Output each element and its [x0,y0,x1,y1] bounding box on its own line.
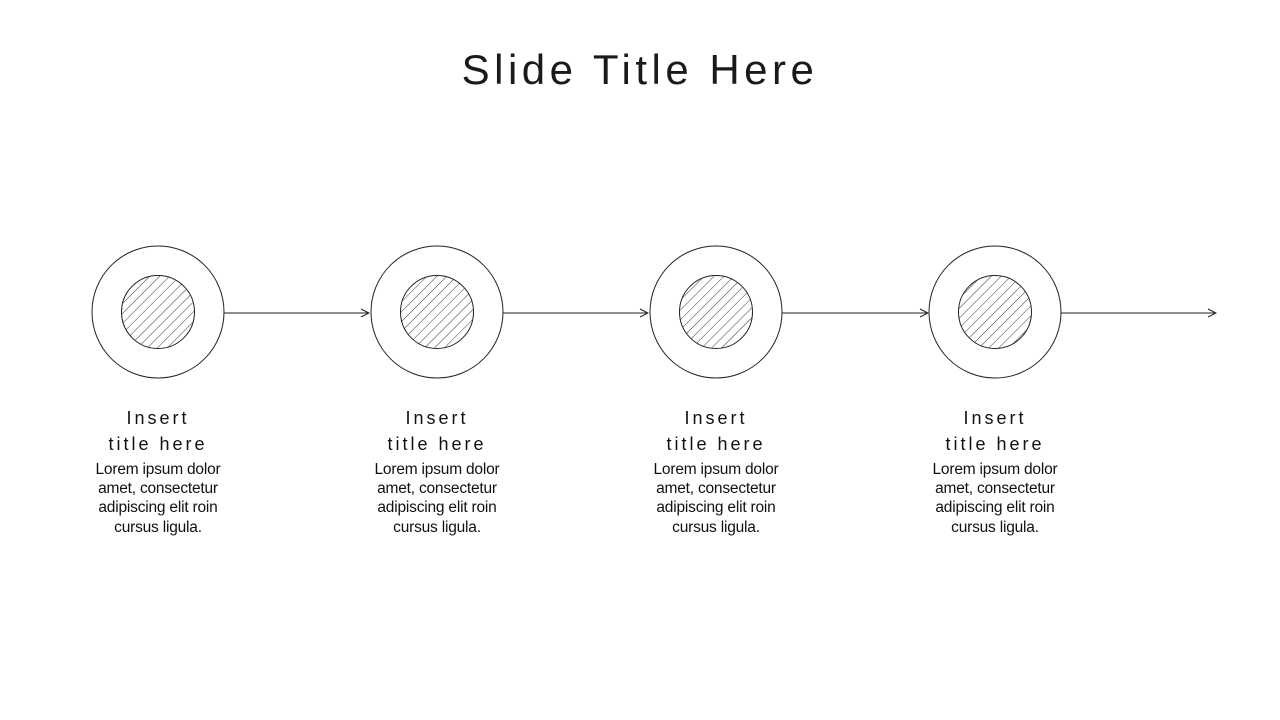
node 1 [92,246,224,378]
text block 2: Insert [405,408,469,428]
text block 1: title here [108,434,208,454]
text block 4: adipiscing elit roin [935,499,1055,516]
text block 3: title here [666,434,766,454]
text block 1 [96,408,220,536]
arrow 3 [782,312,928,314]
arrow 2 [503,312,648,314]
text block 2: Lorem ipsum dolor [375,461,499,478]
title: Slide Title Here [462,46,818,93]
text block 3: amet, consectetur [656,480,776,497]
text block 4: title here [945,434,1045,454]
node 2 [371,246,503,378]
arrow 4 [1061,312,1216,314]
text block 1: Insert [126,408,190,428]
text block 4: Insert [963,408,1027,428]
text block 2: title here [387,434,487,454]
text block 2 [375,408,500,536]
node 4 [929,246,1061,378]
text block 1: cursus ligula. [114,519,202,536]
text block 2: adipiscing elit roin [377,499,497,516]
text block 4: Lorem ipsum dolor [933,461,1057,478]
text block 3: cursus ligula. [672,519,760,536]
arrow 1 [224,312,369,314]
text block 4: cursus ligula. [951,519,1039,536]
text block 4: amet, consectetur [935,480,1055,497]
text block 3: Insert [684,408,748,428]
text block 2: amet, consectetur [377,480,497,497]
node 3 [650,246,782,378]
text block 1: amet, consectetur [98,480,218,497]
text block 3: adipiscing elit roin [656,499,776,516]
text block 1: Lorem ipsum dolor [96,461,220,478]
text block 2: cursus ligula. [393,519,481,536]
text block 1: adipiscing elit roin [98,499,218,516]
text block 3 [654,408,778,536]
text block 3: Lorem ipsum dolor [654,461,778,478]
text block 4 [933,408,1058,536]
